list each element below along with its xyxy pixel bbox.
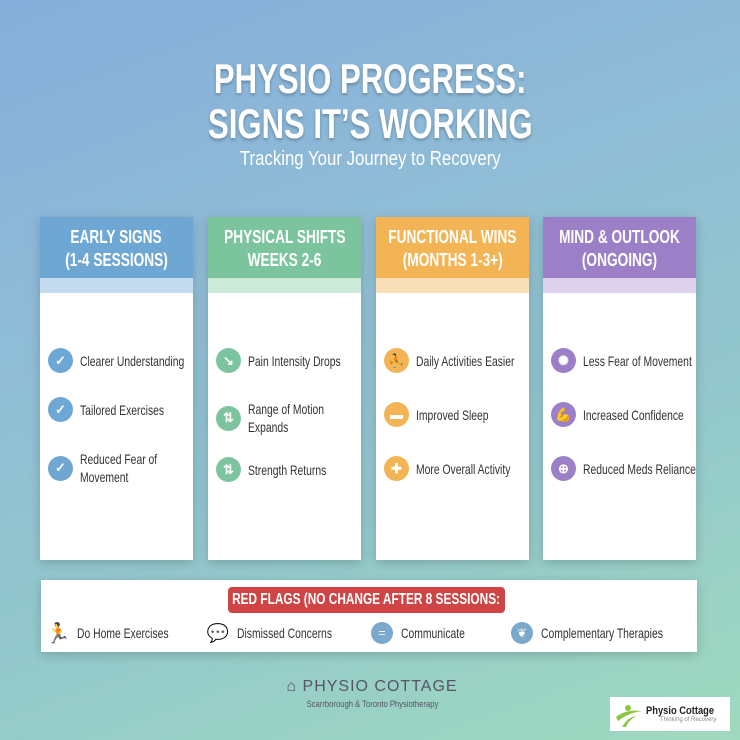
red flags heading: RED FLAGS (NO CHANGE AFTER 8 SESSIONS:	[233, 591, 500, 608]
item: strength: ⇅	[223, 462, 234, 476]
item: complementary therapies: ❦	[517, 626, 527, 640]
item: strength: Strength Returns	[248, 462, 326, 478]
item: range of motion: Expands	[248, 419, 288, 435]
item: complementary therapies: Complementary Therapies	[541, 625, 663, 641]
item: reduced fear: Movement	[80, 469, 128, 485]
title: PHYSIO PROGRESS:	[214, 55, 526, 102]
panel: physical shifts	[208, 217, 361, 560]
heading: functional wins: (MONTHS 1-3+)	[403, 250, 502, 270]
red flags heading	[228, 587, 505, 613]
item: pain drops: Pain Intensity Drops	[248, 352, 341, 368]
item: home exercises	[46, 622, 169, 644]
corner logo: Thinking of Recovery	[660, 717, 716, 723]
item: home exercises: Do Home Exercises	[77, 625, 169, 641]
item: confidence	[551, 402, 684, 427]
item: range of motion: ⇅	[223, 410, 234, 425]
item: dismissed concerns	[207, 622, 332, 643]
item: overall activity: More Overall Activity	[416, 460, 510, 476]
item: less fear: Less Fear of Movement	[583, 352, 692, 368]
panel: mind & outlook	[543, 217, 696, 560]
item: pain drops	[216, 348, 341, 373]
item: confidence: 💪	[555, 406, 572, 422]
heading: functional wins: FUNCTIONAL WINS	[388, 227, 517, 247]
item: dismissed concerns: 💬	[207, 622, 229, 642]
heading: mind & outlook: MIND & OUTLOOK	[559, 227, 680, 247]
item: communicate: Communicate	[401, 625, 465, 641]
item: clearer understanding: ✓	[55, 352, 66, 368]
item: sleep: Improved Sleep	[416, 406, 489, 422]
item: reduced fear	[48, 451, 158, 485]
item: range of motion	[216, 401, 324, 435]
item: less fear: ✺	[558, 352, 569, 368]
item: dismissed concerns: Dismissed Concerns	[237, 625, 332, 641]
item: tailored exercises: Tailored Exercises	[80, 402, 164, 418]
item: daily activities: ⛹	[388, 352, 405, 368]
corner logo: Physio Cottage	[646, 705, 714, 717]
heading: early signs: EARLY SIGNS	[71, 227, 162, 247]
panel: early signs	[40, 217, 193, 560]
item: meds	[551, 456, 696, 481]
heading: mind & outlook	[543, 217, 696, 278]
footer logo	[286, 678, 458, 709]
item: pain drops: ↘	[223, 352, 234, 368]
heading: functional wins	[376, 217, 529, 278]
item: clearer understanding: Clearer Understanding	[80, 352, 184, 368]
item: tailored exercises	[48, 397, 164, 422]
item: daily activities: Daily Activities Easier	[416, 352, 514, 368]
item: complementary therapies	[511, 622, 663, 644]
heading: physical shifts: PHYSICAL SHIFTS	[224, 227, 345, 247]
heading: early signs	[40, 217, 193, 278]
footer logo: Scarrborough & Toronto Physiotherapy	[306, 699, 438, 709]
heading: physical shifts	[208, 217, 361, 278]
item: confidence: Increased Confidence	[583, 406, 684, 422]
heading: mind & outlook: (ONGOING)	[582, 250, 657, 270]
item: home exercises: 🏃	[46, 622, 70, 644]
item: clearer understanding	[48, 348, 184, 373]
item: overall activity: ✚	[391, 460, 402, 476]
panel: red flags	[41, 580, 697, 652]
title: SIGNS IT’S WORKING	[208, 100, 532, 147]
item: communicate: =	[378, 626, 386, 640]
title	[208, 55, 532, 147]
item: meds: Reduced Meds Reliance	[583, 460, 696, 476]
panel: functional wins	[376, 217, 529, 560]
item: strength	[216, 457, 326, 482]
item: meds: ⊕	[558, 460, 569, 476]
item: overall activity	[384, 456, 510, 481]
heading: physical shifts: WEEKS 2-6	[248, 250, 321, 270]
subtitle: Tracking Your Journey to Recovery	[240, 148, 500, 170]
corner logo	[610, 697, 730, 731]
item: reduced fear: ✓	[55, 460, 66, 475]
item: range of motion: Range of Motion	[248, 401, 324, 417]
heading: early signs: (1-4 SESSIONS)	[65, 250, 168, 270]
item: daily activities	[384, 348, 514, 373]
item: sleep	[384, 402, 489, 427]
item: sleep: ▬	[390, 406, 403, 422]
item: communicate	[371, 622, 465, 644]
footer logo: ⌂ PHYSIO COTTAGE	[286, 678, 458, 695]
item: less fear	[551, 348, 692, 373]
item: reduced fear: Reduced Fear of	[80, 451, 157, 467]
item: tailored exercises: ✓	[55, 402, 66, 416]
